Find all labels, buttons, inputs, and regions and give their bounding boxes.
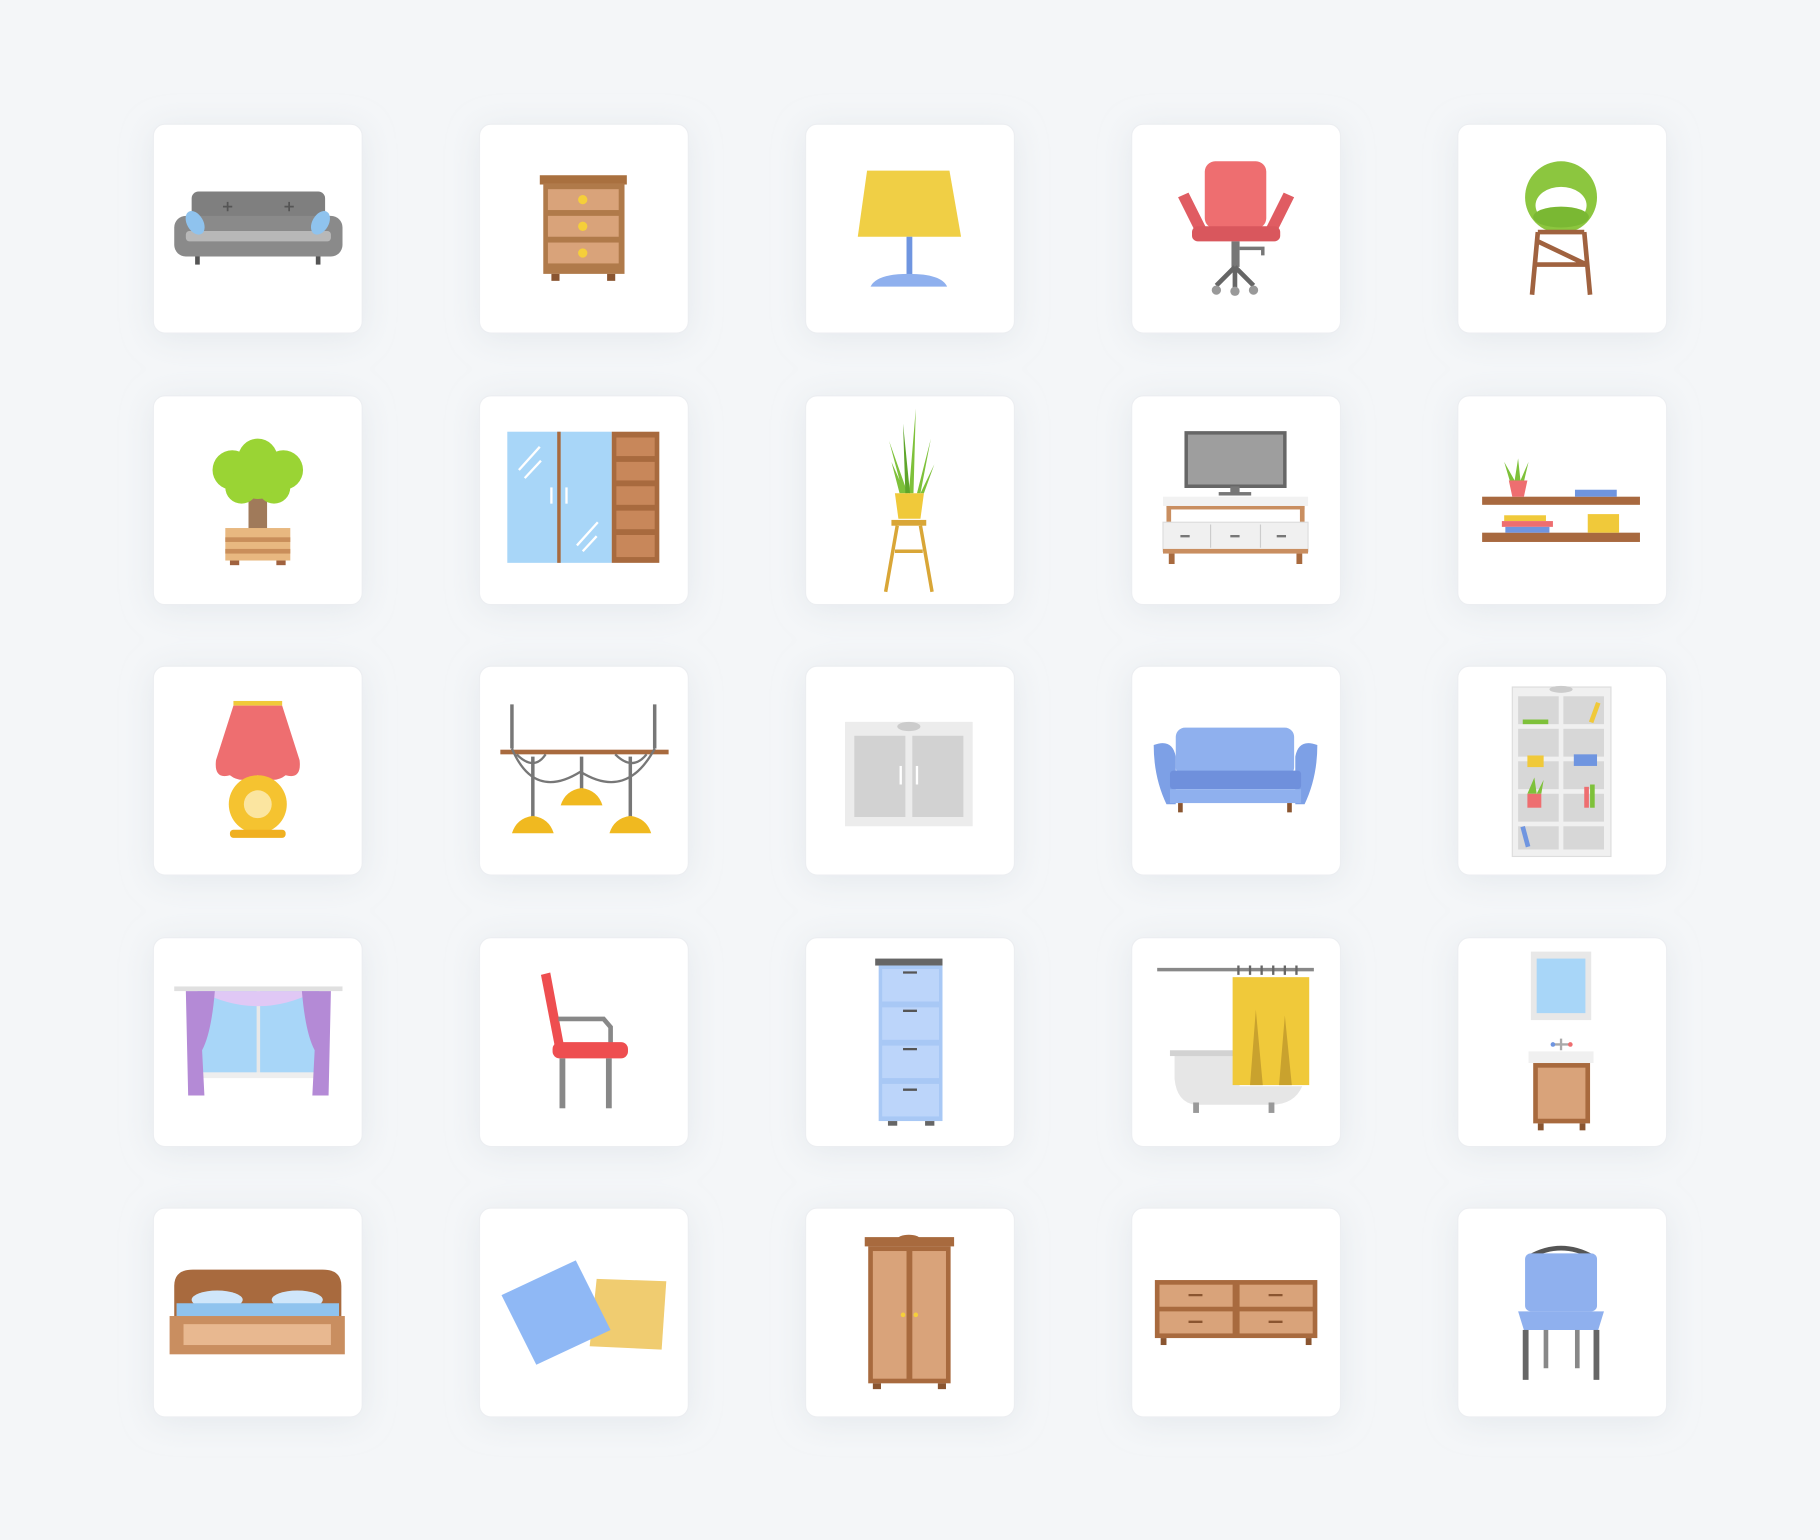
icon: double bed	[170, 1270, 345, 1354]
icon: bathroom sink and mirror	[1529, 952, 1594, 1130]
icon: table lamp	[216, 701, 300, 838]
icon: blue chair	[1518, 1248, 1604, 1380]
icon: office chair	[1178, 161, 1294, 296]
icon: bookshelf	[1512, 686, 1611, 856]
icon: floor lamp	[858, 171, 961, 287]
icon: plant on stand	[886, 409, 934, 592]
icon: wall shelves	[1482, 458, 1640, 542]
icon: green egg chair	[1525, 161, 1597, 295]
icon: pendant lights	[500, 704, 669, 833]
icon: dresser	[1155, 1280, 1317, 1345]
icon: red armchair	[541, 973, 628, 1108]
icon: pillows	[501, 1260, 666, 1365]
cards grid	[153, 124, 1667, 1417]
icon: gray sofa	[174, 191, 343, 265]
icon: bathtub with shower curtain	[1157, 966, 1314, 1113]
icon: blue sofa	[1154, 728, 1317, 812]
icon: filing cabinet	[875, 959, 942, 1126]
icon: wooden wardrobe	[865, 1235, 954, 1389]
icon: drawer chest	[540, 175, 627, 281]
icon: potted tree	[213, 439, 303, 565]
icon: glass wardrobe	[507, 432, 659, 563]
icon: TV stand	[1163, 433, 1308, 564]
icon: sideboard cabinet	[845, 722, 973, 826]
icon: window with curtains	[174, 986, 343, 1096]
